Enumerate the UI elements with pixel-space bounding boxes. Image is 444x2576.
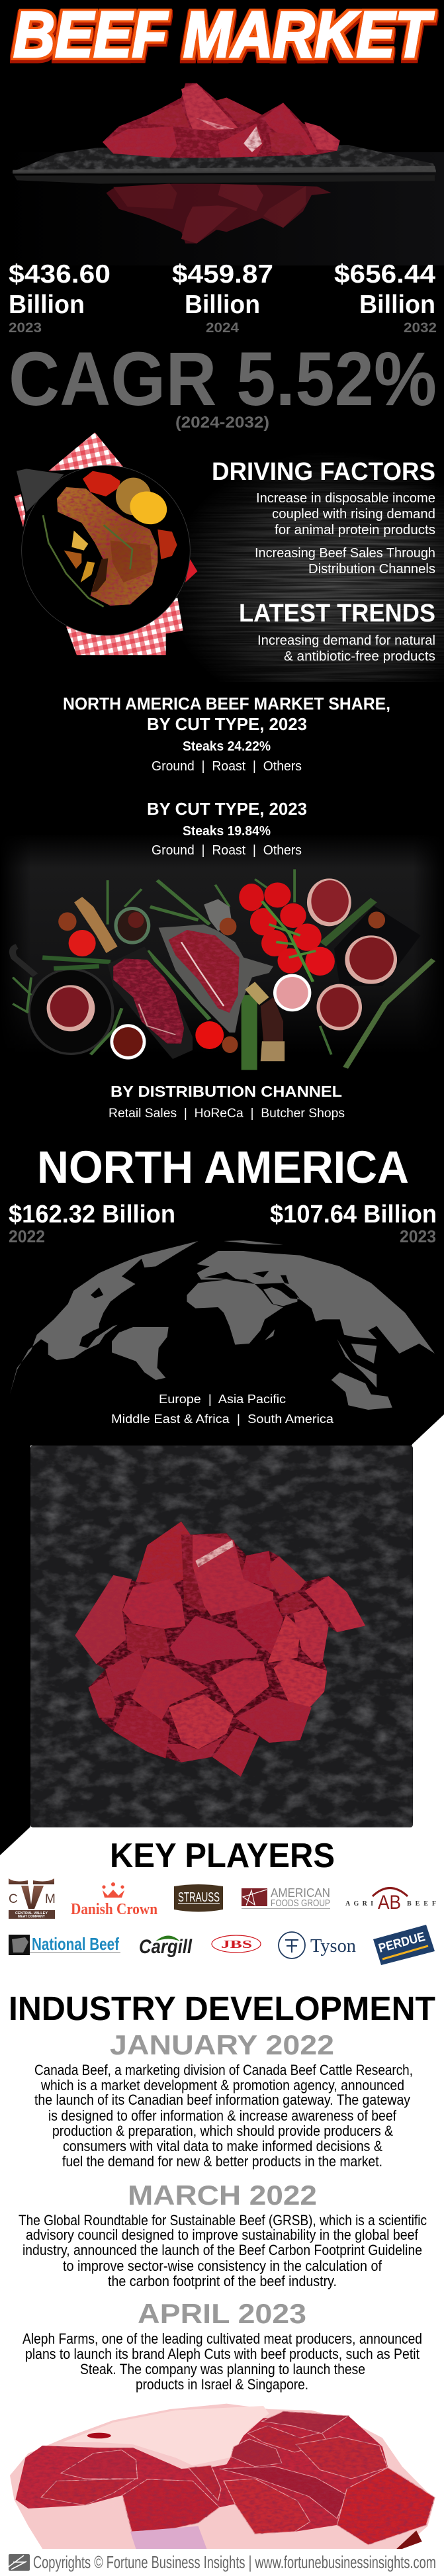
development: January 2022: which is a market development & promotion agency, announced bbox=[40, 2077, 404, 2093]
stat: 2032 market size: 2032 bbox=[404, 320, 437, 336]
logo: National Beef bbox=[9, 1934, 120, 1955]
development: March 2022: MARCH 2022 bbox=[128, 2180, 317, 2211]
single tomato bottom bbox=[195, 1021, 224, 1049]
tomato vine bbox=[239, 882, 335, 982]
spread background bbox=[0, 834, 444, 1079]
heading: driving factors: coupled with rising demand bbox=[272, 507, 435, 522]
stat: 2032 market size bbox=[334, 260, 437, 336]
logo: American Foods Group: AMERICAN bbox=[271, 1886, 330, 1900]
meat pile bbox=[103, 83, 340, 158]
logo: Agri Beef bbox=[345, 1888, 436, 1913]
footer logo bbox=[9, 2554, 30, 2571]
steak B bbox=[169, 930, 240, 1013]
development: January 2022 bbox=[34, 2029, 413, 2170]
wooden knife handle bbox=[74, 897, 118, 953]
world map bbox=[10, 1240, 435, 1410]
background: black upper page bbox=[0, 0, 444, 1446]
market share by cut type, North America: Ground | Roast | Others bbox=[152, 759, 302, 774]
illustration: grilled steak on plate with napkin bbox=[15, 432, 197, 655]
development: January 2022: is designed to offer information & increase awareness of beef bbox=[48, 2107, 397, 2124]
bacon-wrapped fillets bbox=[47, 878, 397, 1031]
logo: Central Valley Meat: CENTRAL VALLEY bbox=[15, 1911, 48, 1915]
stat: 2023 market size: 2023 bbox=[9, 320, 42, 336]
meat reflection bbox=[106, 184, 332, 244]
potato wedges bbox=[64, 531, 95, 582]
logo: Central Valley Meat: C bbox=[9, 1892, 18, 1906]
cleaver bbox=[159, 899, 273, 1033]
wood texture panel bbox=[152, 450, 444, 682]
hero image: meat on slate with reflection bbox=[0, 83, 444, 265]
illustration: raw beef cuts, tomatoes and herbs bbox=[13, 869, 433, 1070]
heading: key players: KEY PLAYERS bbox=[110, 1837, 335, 1875]
rosemary bbox=[43, 515, 132, 607]
logo: Strauss: STRAUSS bbox=[178, 1890, 220, 1905]
market share by cut type, North America: BY CUT TYPE, 2023 bbox=[147, 714, 307, 734]
background: lower white page with corner cuts bbox=[0, 1414, 444, 2576]
market share by cut type, global: BY CUT TYPE, 2023 bbox=[147, 799, 307, 819]
distribution channel: BY DISTRIBUTION CHANNEL bbox=[111, 1083, 342, 1100]
roasted tomato bbox=[83, 471, 120, 496]
slate square bbox=[30, 1446, 413, 1827]
region: North America: $107.64 Billion bbox=[270, 1201, 437, 1228]
steak bbox=[57, 487, 157, 606]
single tomato left bbox=[69, 930, 96, 956]
heading: latest trends: LATEST TRENDS bbox=[239, 600, 435, 627]
logo: American Foods Group: FOODS GROUP bbox=[271, 1898, 330, 1909]
salt bowl bbox=[273, 974, 311, 1011]
development: January 2022: fuel the demand for new & better products in the market. bbox=[62, 2153, 382, 2170]
stat: 2032 market size: Billion bbox=[359, 291, 435, 319]
illustration: beef cubes on square slate bbox=[30, 1446, 413, 1827]
plate bbox=[22, 465, 190, 635]
stat: 2024 market size: 2024 bbox=[206, 320, 239, 336]
logo: Agri Beef: BEEF bbox=[407, 1900, 436, 1908]
stat: 2023 market size: $436.60 bbox=[9, 260, 111, 289]
other regions bbox=[111, 1393, 334, 1426]
muscle sections bbox=[16, 2411, 435, 2545]
marrow spot bbox=[87, 2433, 111, 2438]
development: April 2023: Steak. The company was planning to launch these bbox=[80, 2361, 365, 2377]
logo: American Foods Group bbox=[242, 1886, 330, 1909]
logo: Central Valley Meat: MEAT COMPANY bbox=[18, 1915, 46, 1919]
logo: JBS: JBS bbox=[221, 1938, 252, 1951]
development: March 2022: to improve sector-wise consistency in the calculation of bbox=[63, 2258, 382, 2274]
stat: 2024 market size: $459.87 bbox=[172, 260, 273, 289]
logo: Central Valley Meat: M bbox=[45, 1892, 56, 1906]
market share by cut type, global bbox=[147, 799, 307, 858]
development: January 2022: JANUARY 2022 bbox=[110, 2029, 334, 2060]
market share by cut type, global: Steaks 19.84% bbox=[183, 824, 271, 839]
pan handle bbox=[17, 469, 64, 512]
heading: latest trends: Increasing demand for natural bbox=[257, 633, 435, 648]
napkin bbox=[15, 432, 197, 655]
CAGR figure: (2024-2032) bbox=[175, 414, 269, 432]
distribution channel bbox=[109, 1083, 345, 1121]
knife board bbox=[108, 946, 193, 1059]
stat: 2024 market size bbox=[172, 260, 273, 336]
logo: Agri Beef: AB bbox=[378, 1892, 401, 1913]
herbs bbox=[13, 869, 433, 1070]
peppercorn bowl bbox=[114, 907, 150, 944]
development: March 2022 bbox=[19, 2180, 427, 2289]
heading: latest trends: & antibiotic-free products bbox=[284, 649, 435, 664]
bone bbox=[62, 2406, 269, 2465]
logo: Tyson bbox=[279, 1932, 356, 1958]
logo: JBS bbox=[212, 1935, 261, 1953]
development: April 2023: APRIL 2023 bbox=[138, 2298, 306, 2329]
fat and silhouette bbox=[10, 2404, 435, 2549]
steak A bbox=[113, 958, 184, 1044]
logo: Perdue: PERDUE bbox=[377, 1930, 427, 1956]
stat: 2023 market size: Billion bbox=[9, 291, 85, 319]
heading: driving factors: Increasing Beef Sales Through bbox=[255, 546, 435, 561]
star anise bbox=[58, 911, 385, 1053]
right slate board bbox=[334, 905, 421, 986]
logo: Strauss bbox=[174, 1884, 223, 1911]
market share by cut type, North America: Steaks 24.22% bbox=[183, 739, 271, 754]
logo: Danish Crown bbox=[71, 1882, 157, 1918]
lemon back bbox=[116, 478, 151, 515]
heading: industry development: INDUSTRY DEVELOPMENT bbox=[9, 1990, 435, 2027]
heading: driving factors bbox=[212, 458, 435, 576]
purple tendon bbox=[130, 2526, 206, 2549]
region: North America: 2023 bbox=[400, 1226, 436, 1246]
dark underside bbox=[396, 2530, 422, 2549]
slate reflection bbox=[14, 175, 435, 184]
market share by cut type, North America bbox=[63, 694, 390, 774]
chili flake bowl bbox=[110, 1024, 146, 1060]
development: April 2023 bbox=[22, 2298, 422, 2393]
development: March 2022: the carbon footprint of the beef industry. bbox=[108, 2273, 337, 2289]
market share by cut type, North America: NORTH AMERICA BEEF MARKET SHARE, bbox=[63, 694, 390, 713]
development: April 2023: products in Israel & Singapore. bbox=[136, 2376, 308, 2393]
illustration: beef shank cross-section bbox=[10, 2404, 435, 2549]
heading: driving factors: Increase in disposable income bbox=[256, 491, 435, 506]
logo: National Beef: National Beef bbox=[32, 1934, 119, 1954]
other regions: Europe | Asia Pacific bbox=[159, 1393, 286, 1406]
region: North America bbox=[9, 1142, 437, 1246]
region: North America: 2022 bbox=[9, 1226, 45, 1246]
stat: 2024 market size: Billion bbox=[185, 291, 260, 319]
distribution channel: Retail Sales | HoReCa | Butcher Shops bbox=[109, 1107, 345, 1121]
lemon front bbox=[125, 486, 171, 529]
heading: driving factors: Distribution Channels bbox=[308, 562, 435, 576]
region: North America: $162.32 Billion bbox=[9, 1201, 175, 1228]
other regions: Middle East & Africa | South America bbox=[111, 1412, 334, 1426]
logo: Cargill: Cargill bbox=[139, 1936, 193, 1958]
skillet bbox=[13, 946, 112, 1054]
logo: Perdue bbox=[373, 1925, 435, 1965]
logo: Central Valley Meat bbox=[9, 1878, 56, 1919]
heading: latest trends bbox=[239, 600, 435, 664]
development: January 2022: production & preparation, which should provide producers & bbox=[52, 2123, 393, 2139]
stat: 2032 market size: $656.44 bbox=[334, 260, 435, 289]
stat: 2023 market size bbox=[9, 260, 111, 336]
cleaver handle bbox=[245, 982, 285, 1061]
logo: Agri Beef: AGRI bbox=[345, 1900, 373, 1908]
heading: driving factors: for animal protein products bbox=[275, 523, 435, 537]
slate board bbox=[11, 145, 436, 173]
development: January 2022: consumers with vital data to make informed decisions & bbox=[63, 2138, 382, 2154]
market share by cut type, global: Ground | Roast | Others bbox=[152, 843, 302, 858]
beef cubes bbox=[75, 1522, 365, 1776]
tomato slice bbox=[157, 529, 177, 559]
logo: Danish Crown: Danish Crown bbox=[71, 1901, 157, 1918]
region: North America: NORTH AMERICA bbox=[37, 1142, 409, 1193]
logo: Tyson: Tyson bbox=[310, 1936, 356, 1956]
heading: driving factors: DRIVING FACTORS bbox=[212, 458, 435, 486]
